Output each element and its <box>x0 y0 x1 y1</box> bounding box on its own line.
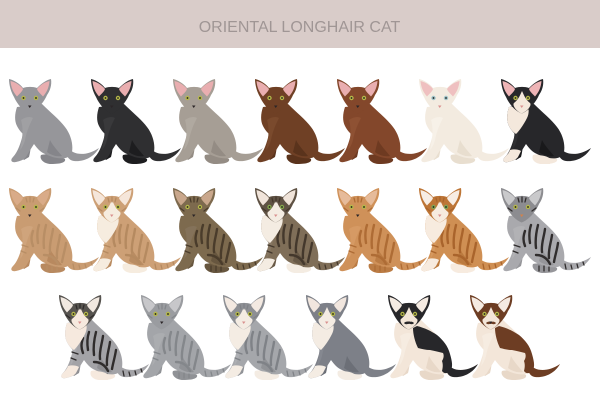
row 3 of cats <box>59 295 560 380</box>
cat: cream and brown bicolour <box>470 295 560 380</box>
cat: silver tabby with white <box>59 295 149 380</box>
cat: solid black <box>91 79 181 164</box>
cat: grey tabby with white <box>223 295 313 380</box>
cat: black with white bib <box>501 79 591 164</box>
row 2 of cats <box>9 188 591 273</box>
title band <box>0 0 600 48</box>
row 1 of cats <box>9 79 591 164</box>
cat: silver black tabby <box>501 188 591 273</box>
cat: orange tabby with white <box>419 188 509 273</box>
cat: solid blue grey <box>9 79 99 164</box>
cat: tan tabby <box>9 188 99 273</box>
cat: brown tabby with white <box>255 188 345 273</box>
cat: solid taupe <box>173 79 263 164</box>
cat: tan tabby with white <box>91 188 181 273</box>
cat: solid chestnut <box>337 79 427 164</box>
cat: dark brown tabby <box>173 188 263 273</box>
cat: orange tabby <box>337 188 427 273</box>
cat: grey tabby <box>141 295 231 380</box>
title: ORIENTAL LONGHAIR CAT <box>199 19 400 36</box>
cat: solid cream <box>419 79 509 164</box>
cat: cream and black bicolour <box>388 295 478 380</box>
cat: blue grey with white <box>306 295 396 380</box>
cat: solid dark brown <box>255 79 345 164</box>
